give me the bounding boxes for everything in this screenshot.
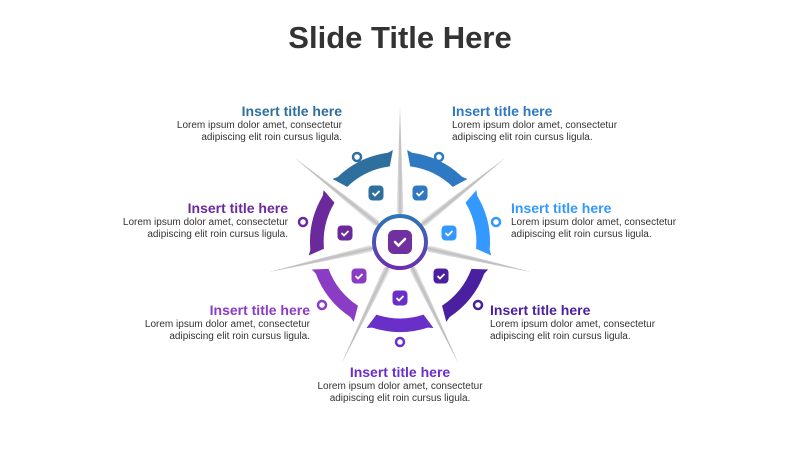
text: top-right: Insert title here: [452, 103, 552, 119]
ring segments: [305, 146, 495, 332]
text: top-left: Lorem ipsum dolor amet, consectetur: [177, 120, 342, 131]
text: bottom-left: Insert title here: [210, 302, 310, 318]
text: top-left: adipiscing elit roin cursus ligula.: [201, 132, 342, 143]
text: left: Insert title here: [188, 200, 288, 216]
text: bottom: Insert title here: [350, 364, 450, 380]
text: right: Lorem ipsum dolor amet, consectetur: [511, 217, 676, 228]
check icons: [338, 186, 456, 306]
text: bottom: Lorem ipsum dolor amet, consectetur: [317, 381, 483, 392]
text: left: Lorem ipsum dolor amet, consectetur: [123, 217, 288, 228]
text: bottom: adipiscing elit roin cursus ligula.: [330, 393, 470, 404]
text: right: adipiscing elit roin cursus ligula.: [511, 229, 652, 240]
text: top-left: Insert title here: [242, 103, 342, 119]
text: right: [511, 200, 676, 240]
text: bottom-left: Lorem ipsum dolor amet, consectetur: [145, 319, 310, 330]
text: top-right: [452, 103, 617, 143]
text: left: adipiscing elit roin cursus ligula.: [147, 229, 288, 240]
spikes: [268, 107, 532, 365]
title: Slide Title Here: [288, 20, 512, 55]
text: bottom-right: adipiscing elit roin cursus ligula.: [490, 331, 631, 342]
center icon: [374, 216, 426, 268]
text: top-right: Lorem ipsum dolor amet, consectetur: [452, 120, 617, 131]
text: left: [123, 200, 288, 240]
text: bottom-left: adipiscing elit roin cursus ligula.: [169, 331, 310, 342]
text: bottom-right: Insert title here: [490, 302, 590, 318]
marker circles: [299, 153, 500, 346]
text: right: Insert title here: [511, 200, 611, 216]
text: top-left: [177, 103, 342, 143]
text: bottom-right: Lorem ipsum dolor amet, consectetur: [490, 319, 655, 330]
text: bottom-left: [145, 302, 310, 342]
text: bottom: [317, 364, 483, 404]
text: bottom-right: [490, 302, 655, 342]
text: top-right: adipiscing elit roin cursus ligula.: [452, 132, 593, 143]
